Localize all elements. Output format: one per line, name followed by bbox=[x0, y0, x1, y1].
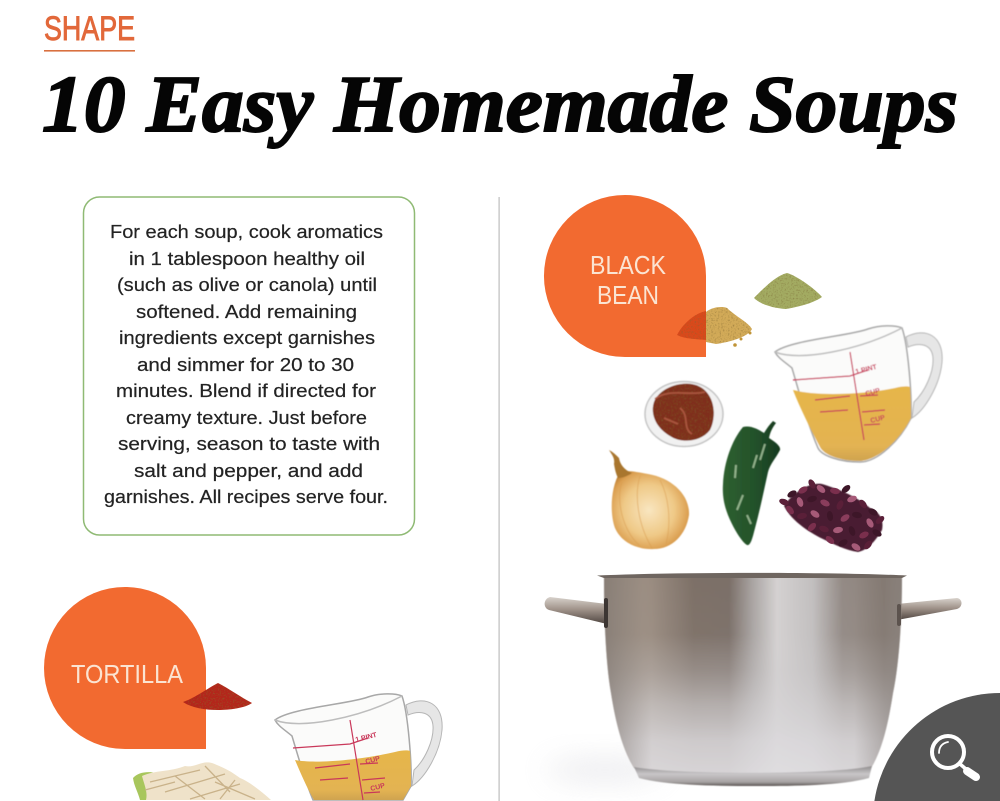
instructions text: and simmer for 20 to 30 bbox=[137, 355, 354, 375]
pot rim bbox=[597, 573, 907, 578]
icon: yellow spice pile bbox=[706, 307, 752, 347]
title: 10 Easy Homemade Soups bbox=[42, 61, 958, 149]
cup markings: CUP bbox=[370, 782, 386, 793]
instructions text: salt and pepper, and add bbox=[134, 461, 363, 481]
instructions text: (such as olive or canola) until bbox=[117, 275, 377, 295]
pot base ring bbox=[634, 766, 872, 786]
icon: poblano pepper bbox=[723, 421, 780, 545]
icon: bowl of chipotle bbox=[645, 382, 723, 446]
instructions text: creamy texture. Just before bbox=[126, 408, 367, 428]
badge: Black Bean bbox=[544, 195, 706, 357]
instructions text bbox=[104, 222, 388, 507]
instructions text: minutes. Blend if directed for bbox=[116, 381, 376, 401]
icon: magnifier bbox=[932, 736, 976, 777]
brand logo: SHAPE: SHAPE bbox=[44, 10, 135, 48]
pot body bbox=[604, 577, 902, 786]
cup markings: 1 PINT bbox=[355, 732, 378, 744]
icon: kidney beans bbox=[778, 478, 886, 552]
badge: Tortilla: TORTILLA bbox=[71, 659, 184, 689]
cup markings bbox=[355, 732, 386, 793]
badge: Black Bean: BEAN bbox=[597, 280, 659, 310]
badge: Tortilla bbox=[44, 587, 206, 749]
pot right handle bbox=[897, 598, 962, 620]
instructions text: For each soup, cook aromatics bbox=[110, 222, 383, 242]
icon: green herb pile bbox=[754, 273, 822, 309]
cup markings: 1 PINT bbox=[855, 364, 878, 376]
icon: measuring cup (black bean) bbox=[775, 326, 942, 462]
badge: Black Bean: BLACK bbox=[590, 250, 667, 280]
divider line bbox=[498, 197, 500, 801]
cup markings: CUP bbox=[865, 387, 881, 398]
instructions text: garnishes. All recipes serve four. bbox=[104, 487, 388, 507]
cup markings bbox=[855, 364, 886, 425]
panel: instructions bbox=[84, 197, 414, 535]
instructions text: serving, season to taste with bbox=[118, 434, 380, 454]
instructions text: in 1 tablespoon healthy oil bbox=[129, 249, 365, 269]
icon: chili powder pile bbox=[183, 683, 252, 710]
icon: bowl of noodles bbox=[133, 762, 271, 800]
instructions text: softened. Add remaining bbox=[136, 302, 357, 322]
icon: stockpot bbox=[545, 573, 962, 786]
zoom button bbox=[874, 693, 1000, 801]
pot left handle bbox=[545, 597, 607, 624]
icon: onion bbox=[609, 450, 689, 549]
icon: measuring cup (tortilla) bbox=[275, 694, 442, 800]
cup markings: CUP bbox=[365, 755, 381, 766]
instructions text: ingredients except garnishes bbox=[119, 328, 375, 348]
cup markings: CUP bbox=[870, 414, 886, 425]
icon: red spice over badge bbox=[677, 311, 706, 340]
